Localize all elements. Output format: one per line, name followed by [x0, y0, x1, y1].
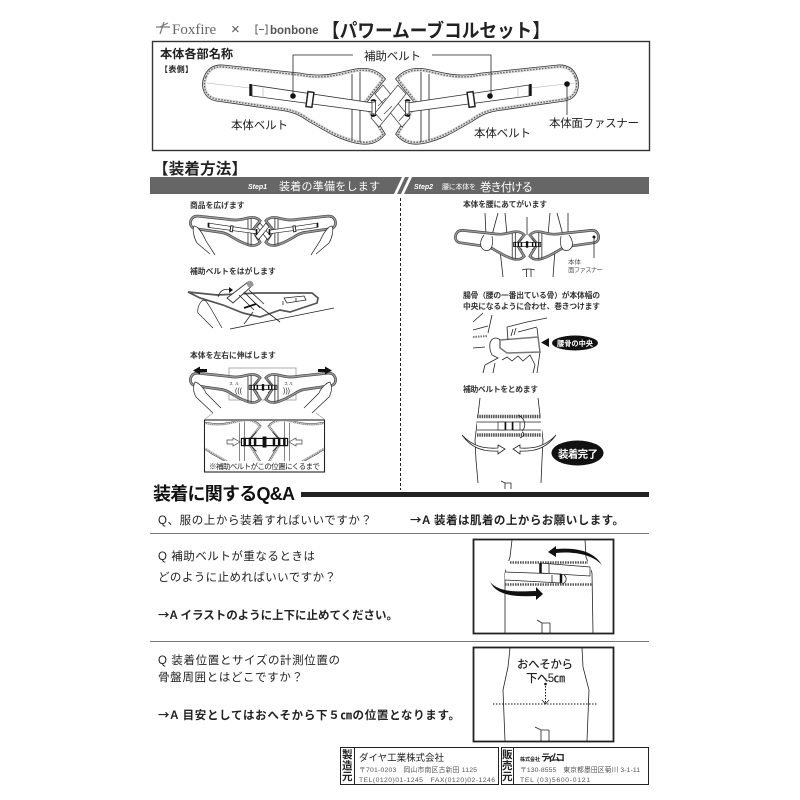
Q3: 骨盤周囲とはどこですか？: [158, 671, 303, 684]
step 1c: stretch left and right: ス ル: [229, 381, 239, 386]
Q2: →A イラストのように上下に止めてください。: [158, 607, 398, 623]
step header bar: Step2: [414, 184, 433, 191]
arrow: lower wrap: [490, 582, 543, 600]
footer: distributor: 〒130-8555 東京都墨田区菊川 3-1-11: [520, 765, 640, 774]
label: front side: 【表側】: [160, 64, 193, 74]
step 1b: peel support belt: 補助ベルトをはがします: [190, 266, 276, 276]
footer: manufacturer: 元: [342, 771, 353, 783]
step 2a: place body on waist: 本体: [568, 257, 582, 266]
step 2a: place body on waist: [455, 199, 603, 277]
badge: wearing complete: [552, 440, 604, 466]
step 1c: stretch left and right: ))): [283, 388, 290, 395]
step 2c: fasten support belt: 補助ベルトをとめます: [463, 384, 538, 394]
footer: manufacturer: [340, 747, 498, 785]
Q1: [158, 512, 624, 528]
arrow: stretch right: [318, 366, 332, 374]
arrow: wrap from left: [462, 435, 505, 454]
step 2a: place body on waist: 本体を腰にあてがいます: [463, 199, 547, 209]
footer: manufacturer: 製: [342, 748, 353, 761]
title: 【パワームーブコルセット】: [322, 19, 550, 42]
illustration: navel measure: 下へ5㎝: [526, 672, 566, 685]
step 2b: align with iliac crest: [463, 290, 600, 373]
cross mark: ×: [231, 21, 240, 38]
step header bar: 腰に本体を: [442, 182, 476, 191]
step header bar: Step1: [248, 184, 267, 191]
belt diagram: [204, 67, 577, 142]
footer: manufacturer: 造: [342, 760, 353, 772]
step header bar: [150, 177, 649, 194]
marker: iliac centre: 腰骨の中央: [557, 339, 594, 348]
badge: wearing complete: 装着完了: [558, 448, 598, 460]
step 2a: place body on waist: 面ファスナー: [568, 266, 603, 274]
Q1: →A 装着は肌着の上からお願いします。: [410, 512, 624, 528]
step 1c: stretch left and right: (((: [235, 388, 243, 395]
inset: belt alignment: [204, 419, 326, 473]
arrow: wrap from right: [513, 435, 556, 454]
Q2: どのように止めればいいですか？: [158, 571, 336, 584]
label: main belt left: 本体ベルト: [231, 118, 288, 132]
label: support belt with leaders: [290, 49, 493, 99]
footer: distributor: 販: [502, 749, 513, 761]
step 1b: peel support belt: [188, 266, 334, 329]
label: fastener with leader: 本体面ファスナー: [549, 116, 639, 130]
footer: distributor: 株式会社: [520, 756, 540, 763]
heading: parts names: 本体各部名称: [160, 46, 233, 61]
panel: parts names: [152, 42, 650, 150]
step 1c: stretch left and right: [190, 350, 336, 419]
footer: distributor: ティムコ: [541, 753, 565, 764]
label: support belt with leaders: 補助ベルト: [364, 49, 421, 63]
inset: belt alignment: ※補助ベルトがこの位置にくるまで: [209, 461, 320, 471]
step header bar: 装着の準備をします: [279, 179, 380, 193]
footer: manufacturer: ダイヤ工業株式会社: [359, 752, 444, 764]
step 1a: unfold product: [190, 200, 336, 255]
step 1a: unfold product: 商品を広げます: [190, 200, 245, 210]
logo: bonbone: bonbone: [270, 25, 319, 37]
Q2: [158, 549, 398, 623]
heading: Q&A: 装着に関するQ&A: [153, 484, 295, 504]
heading: how to wear: 【装着方法】: [153, 159, 247, 178]
arrow: stretch left: [193, 366, 207, 374]
step 2b: align with iliac crest: 腸骨（腰の一番出ている骨）が本体幅の: [463, 290, 600, 300]
Q1: Q、服の上から装着すればいいですか？: [158, 513, 372, 527]
step 2c: fasten support belt: [462, 384, 604, 489]
Q&A heading bar: [301, 492, 649, 497]
step 1c: stretch left and right: スル: [284, 381, 293, 386]
logo: Foxfire: Foxfire: [172, 22, 216, 38]
footer: distributor: TEL (03)5600-0121: [520, 777, 590, 784]
footer: distributor: 売: [502, 759, 513, 772]
Q3: →A 目安としてはおへそから下５㎝の位置となります。: [158, 707, 460, 723]
illustration: overlapping support belts: [474, 540, 614, 634]
label: fastener with leader: [549, 81, 639, 130]
illustration: navel measure: おへそから: [517, 658, 573, 671]
step 2b: align with iliac crest: 中央になるように合わせ、巻きつけます: [463, 301, 600, 311]
label: main belt right: 本体ベルト: [474, 126, 531, 140]
Q3: [158, 653, 460, 723]
Q3: Q 装着位置とサイズの計測位置の: [158, 653, 340, 667]
footer: manufacturer: TEL(0120)01-1245 FAX(0120)02-1246: [359, 777, 495, 784]
footer: distributor: [502, 747, 648, 785]
step header bar: 巻き付ける: [480, 181, 533, 194]
step 1c: stretch left and right: 本体を左右に伸ばします: [190, 350, 276, 360]
Q2: Q 補助ベルトが重なるときは: [158, 549, 315, 563]
arrow: upper wrap: [548, 546, 602, 565]
footer: distributor: 元: [502, 771, 513, 783]
dashed divider: [400, 198, 402, 490]
footer: manufacturer: 〒701-0203 岡山市南区古新田 1125: [359, 765, 477, 774]
illustration: navel measure: [474, 648, 614, 742]
